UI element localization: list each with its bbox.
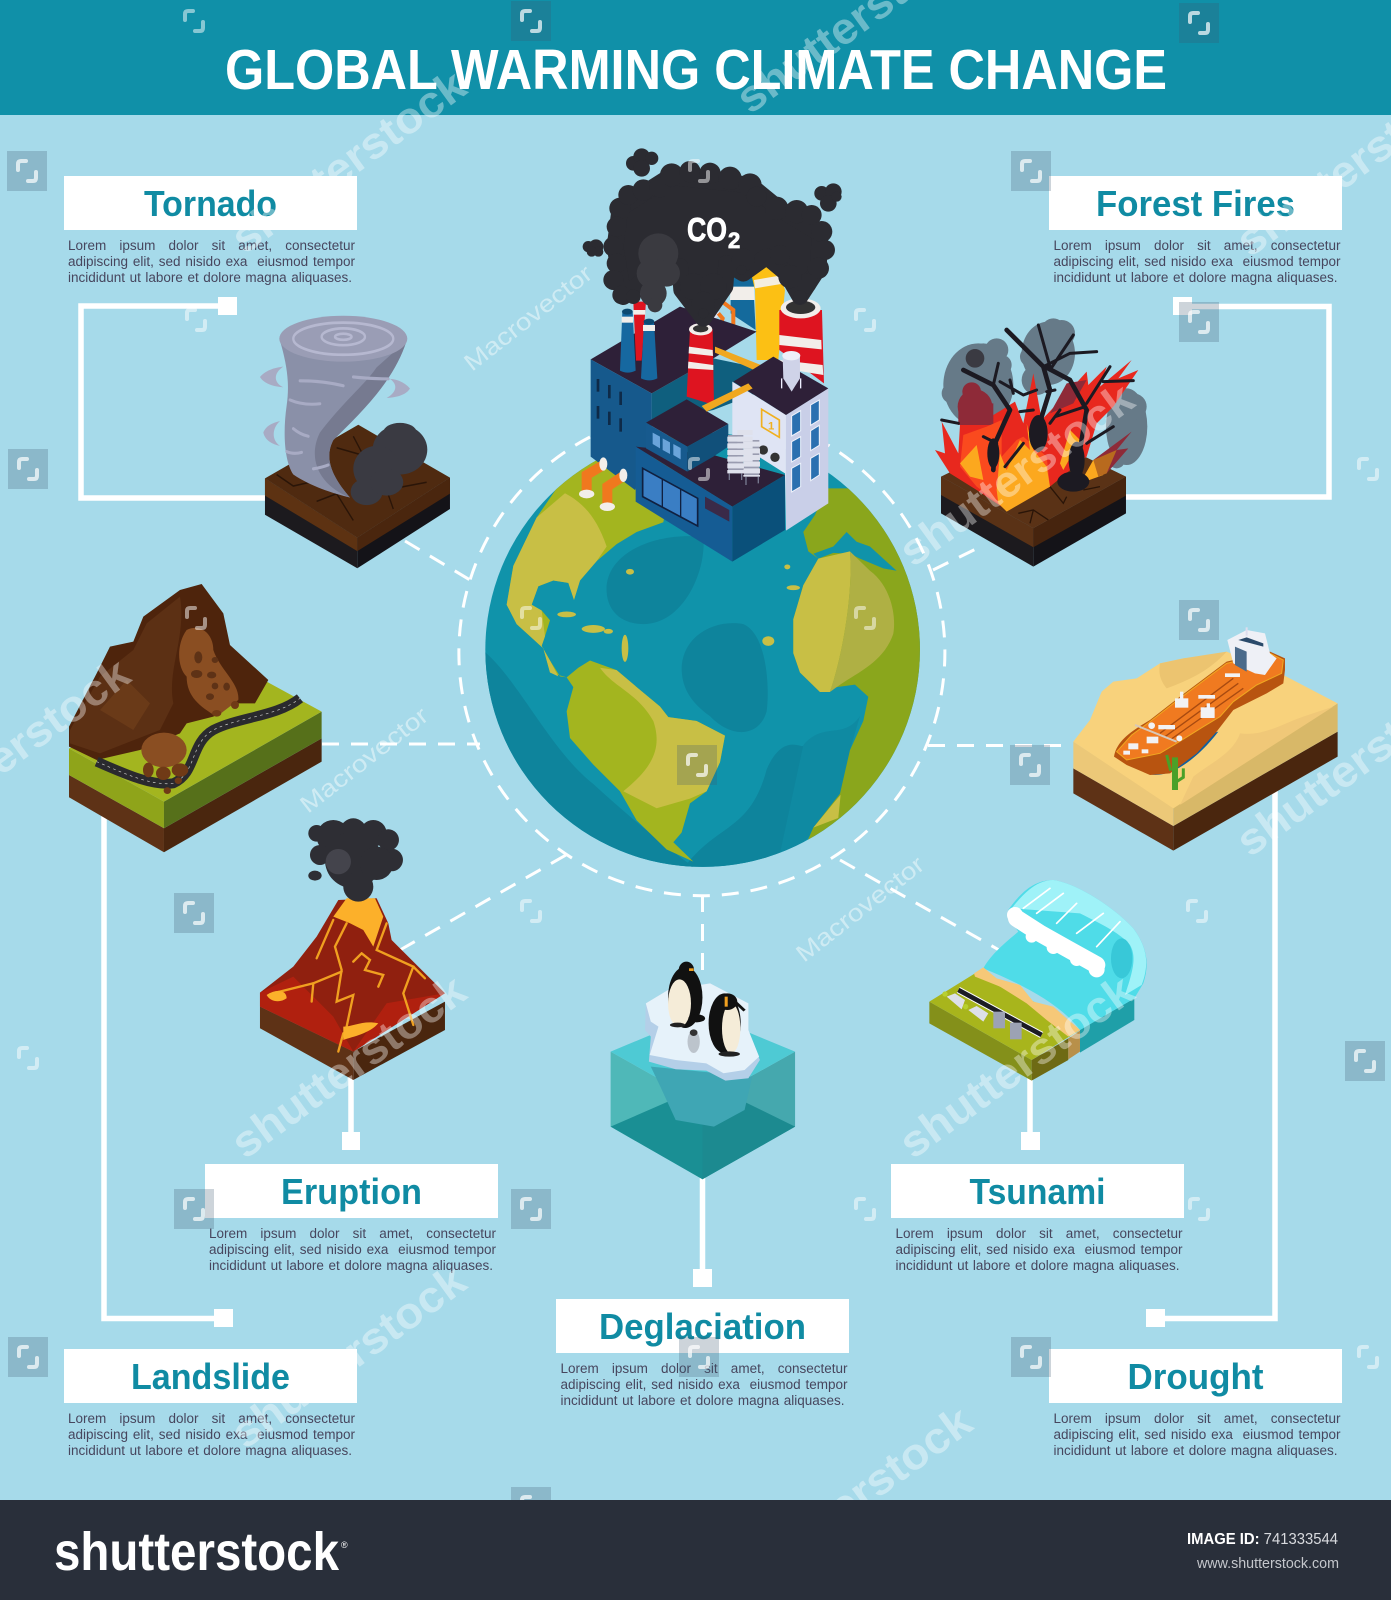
- heading: Drought: [1049, 1349, 1342, 1403]
- dashed connectors: [322, 437, 1073, 975]
- text block: Tsunami: Lorem ipsum dolor sit amet, consectetur: [896, 1226, 1182, 1240]
- drought ship illustration: [1073, 627, 1338, 851]
- CO2 label: 2: [728, 228, 740, 253]
- Macrovector watermarks: [295, 260, 930, 968]
- text block: Eruption: [209, 1226, 496, 1273]
- text block: Tornado: Lorem ipsum dolor sit amet, consectetur: [68, 238, 355, 252]
- eruption illustration: [260, 818, 445, 1080]
- text block: Deglaciation: adipiscing elit, sed nisido exa eiusmod tempor: [560, 1377, 848, 1392]
- solid connector: landslide: [104, 810, 233, 1327]
- text block: Eruption: incididunt ut labore et dolore magna aliquases.: [209, 1258, 493, 1273]
- title: GLOBAL WARMING CLIMATE CHANGE: [225, 38, 1167, 102]
- text block: Tornado: [68, 238, 355, 285]
- heading: Landslide: [64, 1349, 356, 1403]
- text block: Tornado: adipiscing elit, sed nisido exa eiusmod tempor: [68, 254, 355, 269]
- text block: Forest Fires: [1054, 238, 1340, 285]
- text block: Landslide: Lorem ipsum dolor sit amet, consectetur: [68, 1410, 355, 1426]
- Macrovector watermarks: Macrovector: [459, 260, 598, 377]
- image id: IMAGE ID: 741333544: [1187, 1531, 1338, 1548]
- heading: Drought: Drought: [1128, 1356, 1264, 1397]
- panel: Tornado: [64, 176, 357, 285]
- registered mark: ®: [341, 1540, 348, 1550]
- solid connector: tornado: [81, 297, 280, 498]
- footer bar: [0, 1500, 1391, 1600]
- factory: [579, 257, 828, 562]
- deglaciation illustration: [611, 962, 795, 1179]
- text block: Eruption: adipiscing elit, sed nisido exa eiusmod tempor: [209, 1242, 496, 1257]
- white office block: [732, 351, 828, 531]
- Macrovector watermarks: Macrovector: [791, 851, 930, 968]
- silos: [728, 430, 759, 485]
- heading: Deglaciation: Deglaciation: [599, 1306, 806, 1347]
- panel: Deglaciation: [556, 1299, 849, 1408]
- text block: Deglaciation: Lorem ipsum dolor sit amet, consectetur: [560, 1360, 848, 1376]
- panel: Eruption: [205, 1164, 498, 1273]
- shutterstock watermarks: shutterstock: [222, 60, 475, 263]
- heading: Deglaciation: [556, 1299, 849, 1353]
- shutterstock watermarks: shutterstock: [222, 965, 475, 1168]
- shutterstock watermarks: shutterstock: [890, 373, 1143, 576]
- text block: Forest Fires: Lorem ipsum dolor sit amet, consectetur: [1054, 238, 1340, 252]
- text block: Drought: Lorem ipsum dolor sit amet, consectetur: [1054, 1410, 1340, 1426]
- main blue building: [591, 302, 765, 490]
- text block: Tsunami: adipiscing elit, sed nisido exa eiusmod tempor: [896, 1242, 1182, 1257]
- tornado illustration: [260, 316, 450, 568]
- text block: Tsunami: [896, 1226, 1182, 1273]
- solid connector: deglaciation: [693, 1175, 712, 1287]
- text block: Forest Fires: adipiscing elit, sed nisido exa eiusmod tempor: [1054, 254, 1340, 269]
- CO2 label: CO: [687, 211, 727, 248]
- heading: Eruption: [204, 1164, 498, 1218]
- panel: Drought: [1049, 1349, 1342, 1458]
- text block: Deglaciation: incididunt ut labore et dolore magna aliquases.: [560, 1393, 844, 1408]
- footer logo: shutterstock: [54, 1522, 340, 1582]
- solid connector: tsunami: [1021, 1075, 1040, 1150]
- shutterstock watermarks: shutterstock: [728, 1396, 981, 1599]
- heading: Tsunami: [891, 1164, 1184, 1218]
- text block: Landslide: incididunt ut labore et dolore magna aliquases.: [68, 1443, 352, 1458]
- tsunami illustration: [929, 880, 1147, 1081]
- forest fire illustration: [935, 318, 1147, 567]
- text block: Deglaciation: [560, 1360, 848, 1408]
- shutterstock watermarks: shutterstock: [222, 1255, 475, 1458]
- text block: Landslide: [68, 1410, 355, 1458]
- header band: [0, 0, 1391, 115]
- panel: Tsunami: [891, 1164, 1184, 1273]
- heading: Landslide: Landslide: [130, 1356, 290, 1397]
- website: www.shutterstock.com: [1196, 1555, 1339, 1572]
- text block: Tsunami: incididunt ut labore et dolore magna aliquases.: [896, 1258, 1180, 1273]
- smoke cloud: [583, 148, 842, 318]
- low front building: [636, 383, 785, 562]
- globe: [485, 432, 920, 867]
- text block: Eruption: Lorem ipsum dolor sit amet, consectetur: [209, 1226, 496, 1240]
- solid connector: eruption: [342, 1065, 360, 1150]
- text block: Drought: [1054, 1410, 1340, 1458]
- panel: Forest Fires: [1049, 176, 1342, 285]
- text block: Drought: incididunt ut labore et dolore magna aliquases.: [1054, 1443, 1338, 1458]
- heading: Forest Fires: Forest Fires: [1096, 183, 1295, 224]
- landslide illustration: [69, 584, 322, 852]
- heading: Forest Fires: [1049, 176, 1342, 230]
- orange pipes: [579, 457, 627, 511]
- text block: Tornado: incididunt ut labore et dolore magna aliquases.: [68, 270, 352, 285]
- text block: Forest Fires: incididunt ut labore et dolore magna aliquases.: [1054, 270, 1338, 285]
- solid connector: forest fires: [1120, 297, 1329, 497]
- panel: Landslide: [64, 1349, 357, 1458]
- heading: Eruption: Eruption: [280, 1171, 422, 1212]
- heading: Tornado: Tornado: [144, 183, 276, 224]
- text block: Drought: adipiscing elit, sed nisido exa eiusmod tempor: [1054, 1427, 1340, 1442]
- heading: Tsunami: Tsunami: [970, 1171, 1106, 1212]
- white office block: 1: [768, 420, 774, 432]
- text block: Landslide: adipiscing elit, sed nisido exa eiusmod tempor: [68, 1427, 355, 1442]
- solid connector: drought: [1146, 785, 1275, 1327]
- heading: Tornado: [64, 176, 356, 230]
- rear towers: [684, 257, 824, 383]
- shutterstock watermarks: shutterstock: [890, 965, 1143, 1168]
- Macrovector watermarks: Macrovector: [295, 702, 434, 819]
